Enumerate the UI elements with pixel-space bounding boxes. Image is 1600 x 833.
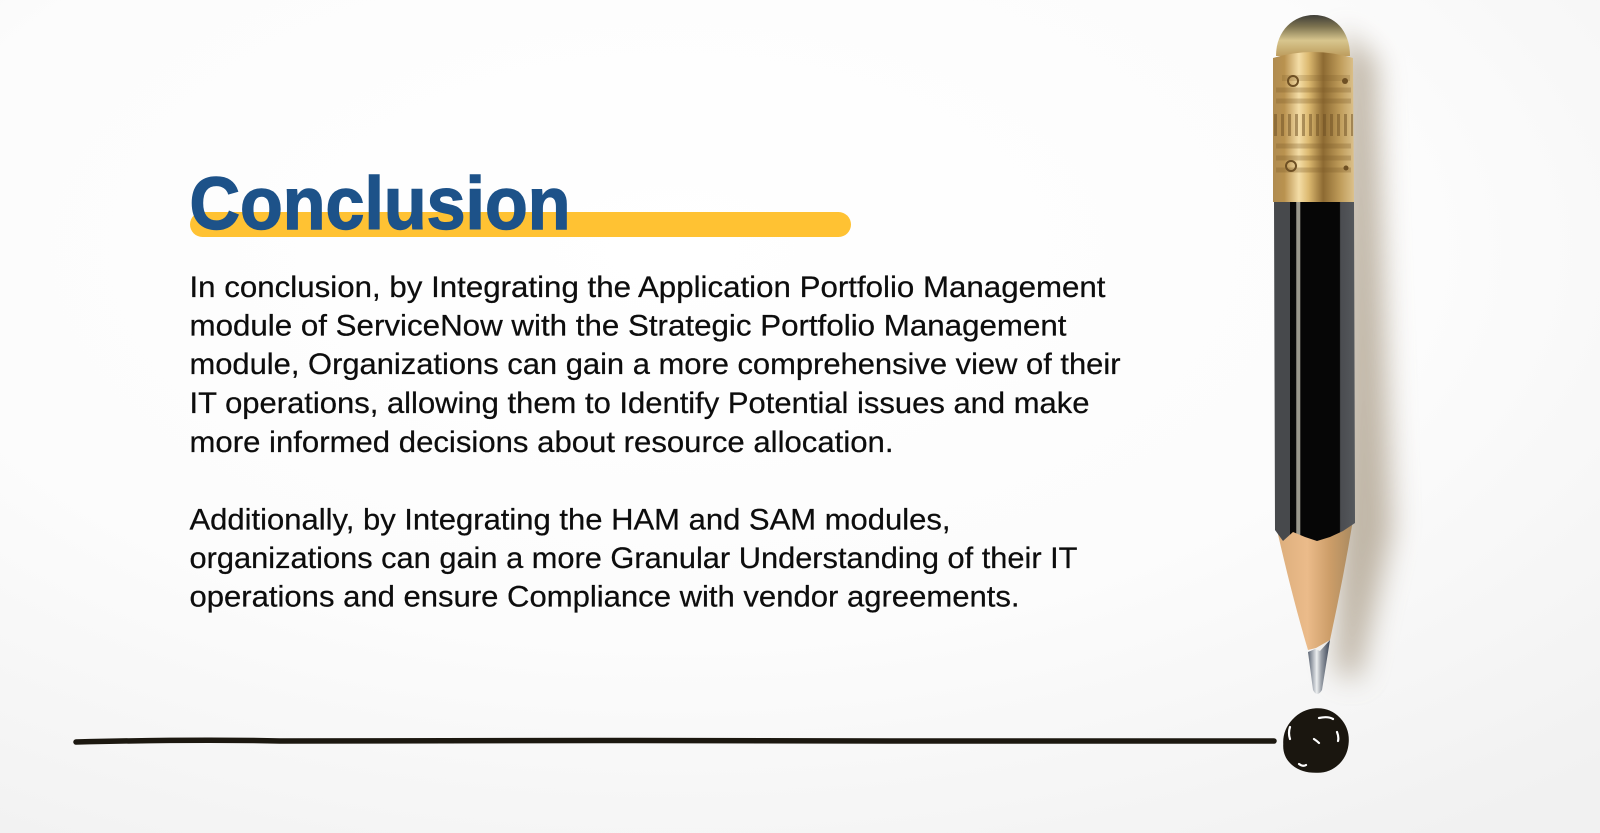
scribbled dot (1284, 709, 1348, 772)
pencil shadow (1336, 30, 1392, 680)
pencil black body (1274, 202, 1355, 541)
text block: first paragraph (190, 271, 1121, 459)
pencil wood tip (1277, 520, 1353, 650)
text block: second paragraph (190, 504, 1078, 614)
pencil lead (1308, 640, 1330, 694)
title: Conclusion (190, 162, 570, 245)
text block: second paragraph: organizations can gain a more Granular Understanding of their IT (190, 542, 1078, 575)
pencil eraser cap (1276, 15, 1350, 56)
drawn line (76, 740, 1274, 742)
heading underline bar (190, 212, 851, 237)
text block: first paragraph: module of ServiceNow with the Strategic Portfolio Management (190, 310, 1067, 342)
text block: first paragraph: IT operations, allowing them to Identify Potential issues and make (190, 387, 1090, 420)
text block: first paragraph: In conclusion, by Integrating the Application Portfolio Management (190, 271, 1106, 304)
text block: first paragraph: module, Organizations can gain a more comprehensive view of their (190, 348, 1121, 381)
text block: second paragraph: Additionally, by Integrating the HAM and SAM modules, (190, 504, 950, 536)
text block: second paragraph: operations and ensure Compliance with vendor agreements. (190, 580, 1020, 614)
illustration: pencil (1273, 15, 1392, 694)
pencil ferrule (1273, 52, 1354, 203)
text block: first paragraph: more informed decisions about resource allocation. (190, 426, 894, 459)
